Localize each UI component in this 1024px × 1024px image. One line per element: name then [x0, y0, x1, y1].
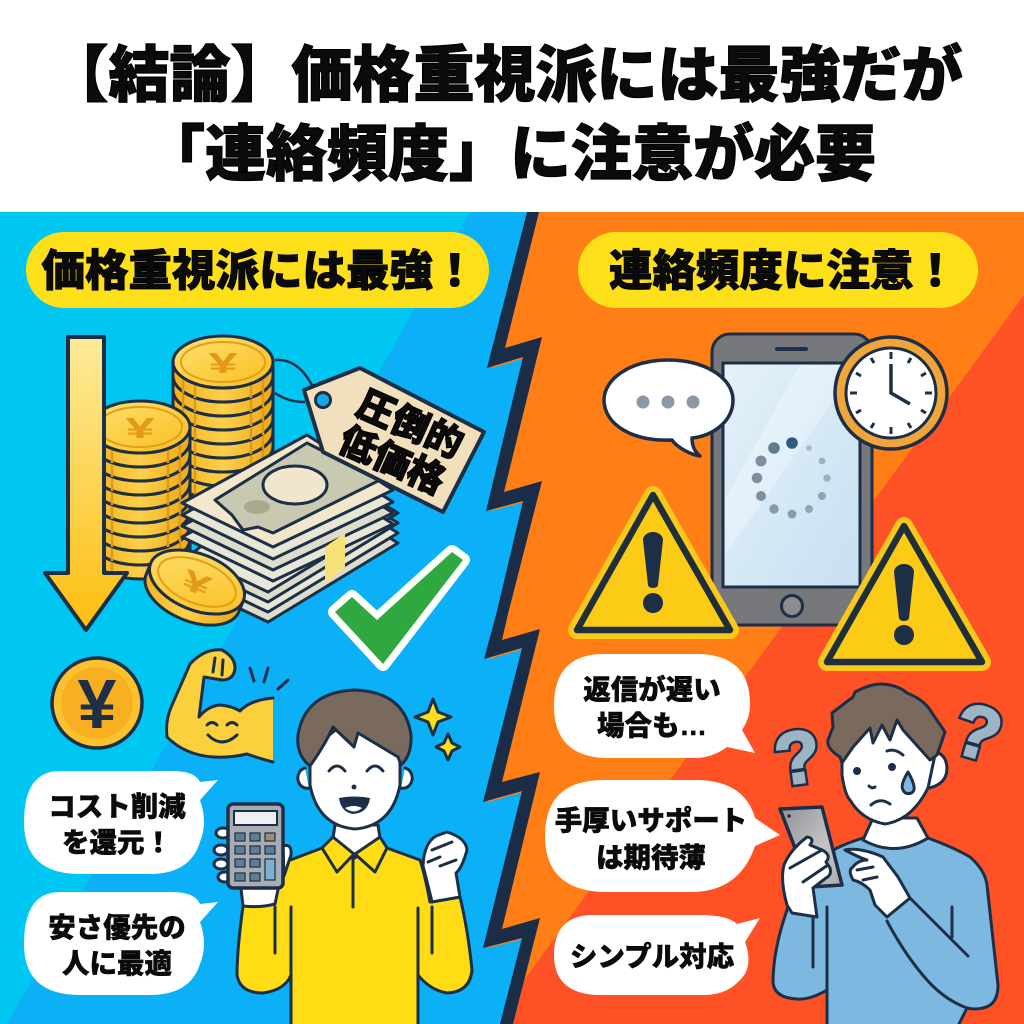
bubble: slow reply: 返信が遅い — [583, 674, 721, 705]
price tag: 圧倒的 — [351, 383, 469, 466]
bubble: low support — [545, 780, 780, 892]
bubble: low support: 手厚いサポート — [555, 805, 747, 836]
left heading pill — [26, 232, 489, 308]
right heading pill — [578, 232, 978, 308]
sweater details — [813, 898, 968, 1024]
hair — [298, 690, 411, 766]
face — [842, 710, 936, 824]
title: 【結論】価格重視派には最強だが — [47, 41, 963, 109]
bubble: cheapest first: 人に最適 — [62, 948, 172, 979]
ears — [298, 768, 412, 788]
sparkles — [415, 699, 460, 760]
confused man with phone — [769, 684, 1011, 1024]
phone in hand — [780, 807, 842, 887]
bubble: slow reply: 場合も… — [597, 710, 707, 741]
pointing hand — [845, 849, 910, 917]
eyes, nose, mouth — [329, 766, 383, 771]
hand holding calculator — [240, 880, 280, 907]
bubble: simple service: シンプル対応 — [570, 941, 735, 972]
eyes, brow, nose, mouth — [853, 750, 903, 805]
bubble: cost reduction — [24, 771, 218, 874]
wall clock — [835, 337, 947, 449]
header background — [0, 0, 1024, 212]
collar — [322, 837, 387, 872]
calculator — [228, 804, 283, 888]
left panel background — [0, 212, 532, 1024]
question mark right: ? — [945, 686, 1011, 778]
face — [310, 715, 400, 829]
coin stack: back: ¥ — [208, 348, 238, 380]
question mark left: ? — [769, 713, 826, 802]
jagged divider — [483, 212, 542, 1024]
bubble: low support: は期待薄 — [596, 842, 706, 873]
shirt details — [275, 857, 432, 975]
coin stack: back — [173, 336, 273, 500]
coin stack: front: ¥ — [125, 413, 155, 445]
question mark right: ? — [945, 686, 1011, 778]
right panel background — [470, 212, 1024, 1024]
bubble: simple service — [554, 915, 760, 995]
raised fist — [423, 832, 467, 902]
arrow pointing down — [45, 337, 127, 630]
title — [47, 41, 963, 188]
yen coin icon: ¥ — [78, 665, 117, 743]
fingers — [214, 828, 291, 882]
loading spinner — [752, 437, 831, 518]
smiling man with calculator — [214, 690, 472, 1024]
yen coin icon — [52, 658, 142, 748]
neck — [863, 818, 928, 849]
price tag: 低価格 — [333, 419, 451, 502]
warning triangle right — [827, 526, 982, 662]
stack of banknotes — [182, 435, 398, 622]
shirt — [237, 838, 472, 1024]
check mark — [335, 552, 463, 664]
warning triangle left — [577, 495, 730, 630]
flexed arm icon — [167, 650, 288, 762]
hair — [828, 684, 945, 763]
bubble: cheapest first: 安さ優先の — [48, 912, 186, 943]
question mark left: ? — [769, 713, 826, 802]
ear — [929, 752, 947, 788]
bubble: cost reduction: を還元！ — [62, 827, 172, 858]
left hand — [783, 837, 830, 917]
bubble: slow reply — [554, 654, 755, 758]
price tag — [275, 360, 484, 512]
tear — [902, 772, 914, 794]
speech bubble with dots — [604, 360, 733, 456]
title: 「連絡頻度」に注意が必要 — [144, 120, 876, 188]
bubble: cheapest first — [24, 892, 218, 995]
bubble: cost reduction: コスト削減 — [48, 791, 186, 822]
neck — [333, 825, 380, 858]
right heading pill: 連絡頻度に注意！ — [609, 248, 957, 296]
sweater — [773, 838, 998, 1024]
left heading pill: 価格重視派には最強！ — [42, 248, 476, 296]
fallen coin — [136, 537, 254, 638]
smartphone — [712, 334, 872, 625]
coin stack: front — [90, 401, 190, 579]
fallen coin: ¥ — [177, 562, 216, 603]
